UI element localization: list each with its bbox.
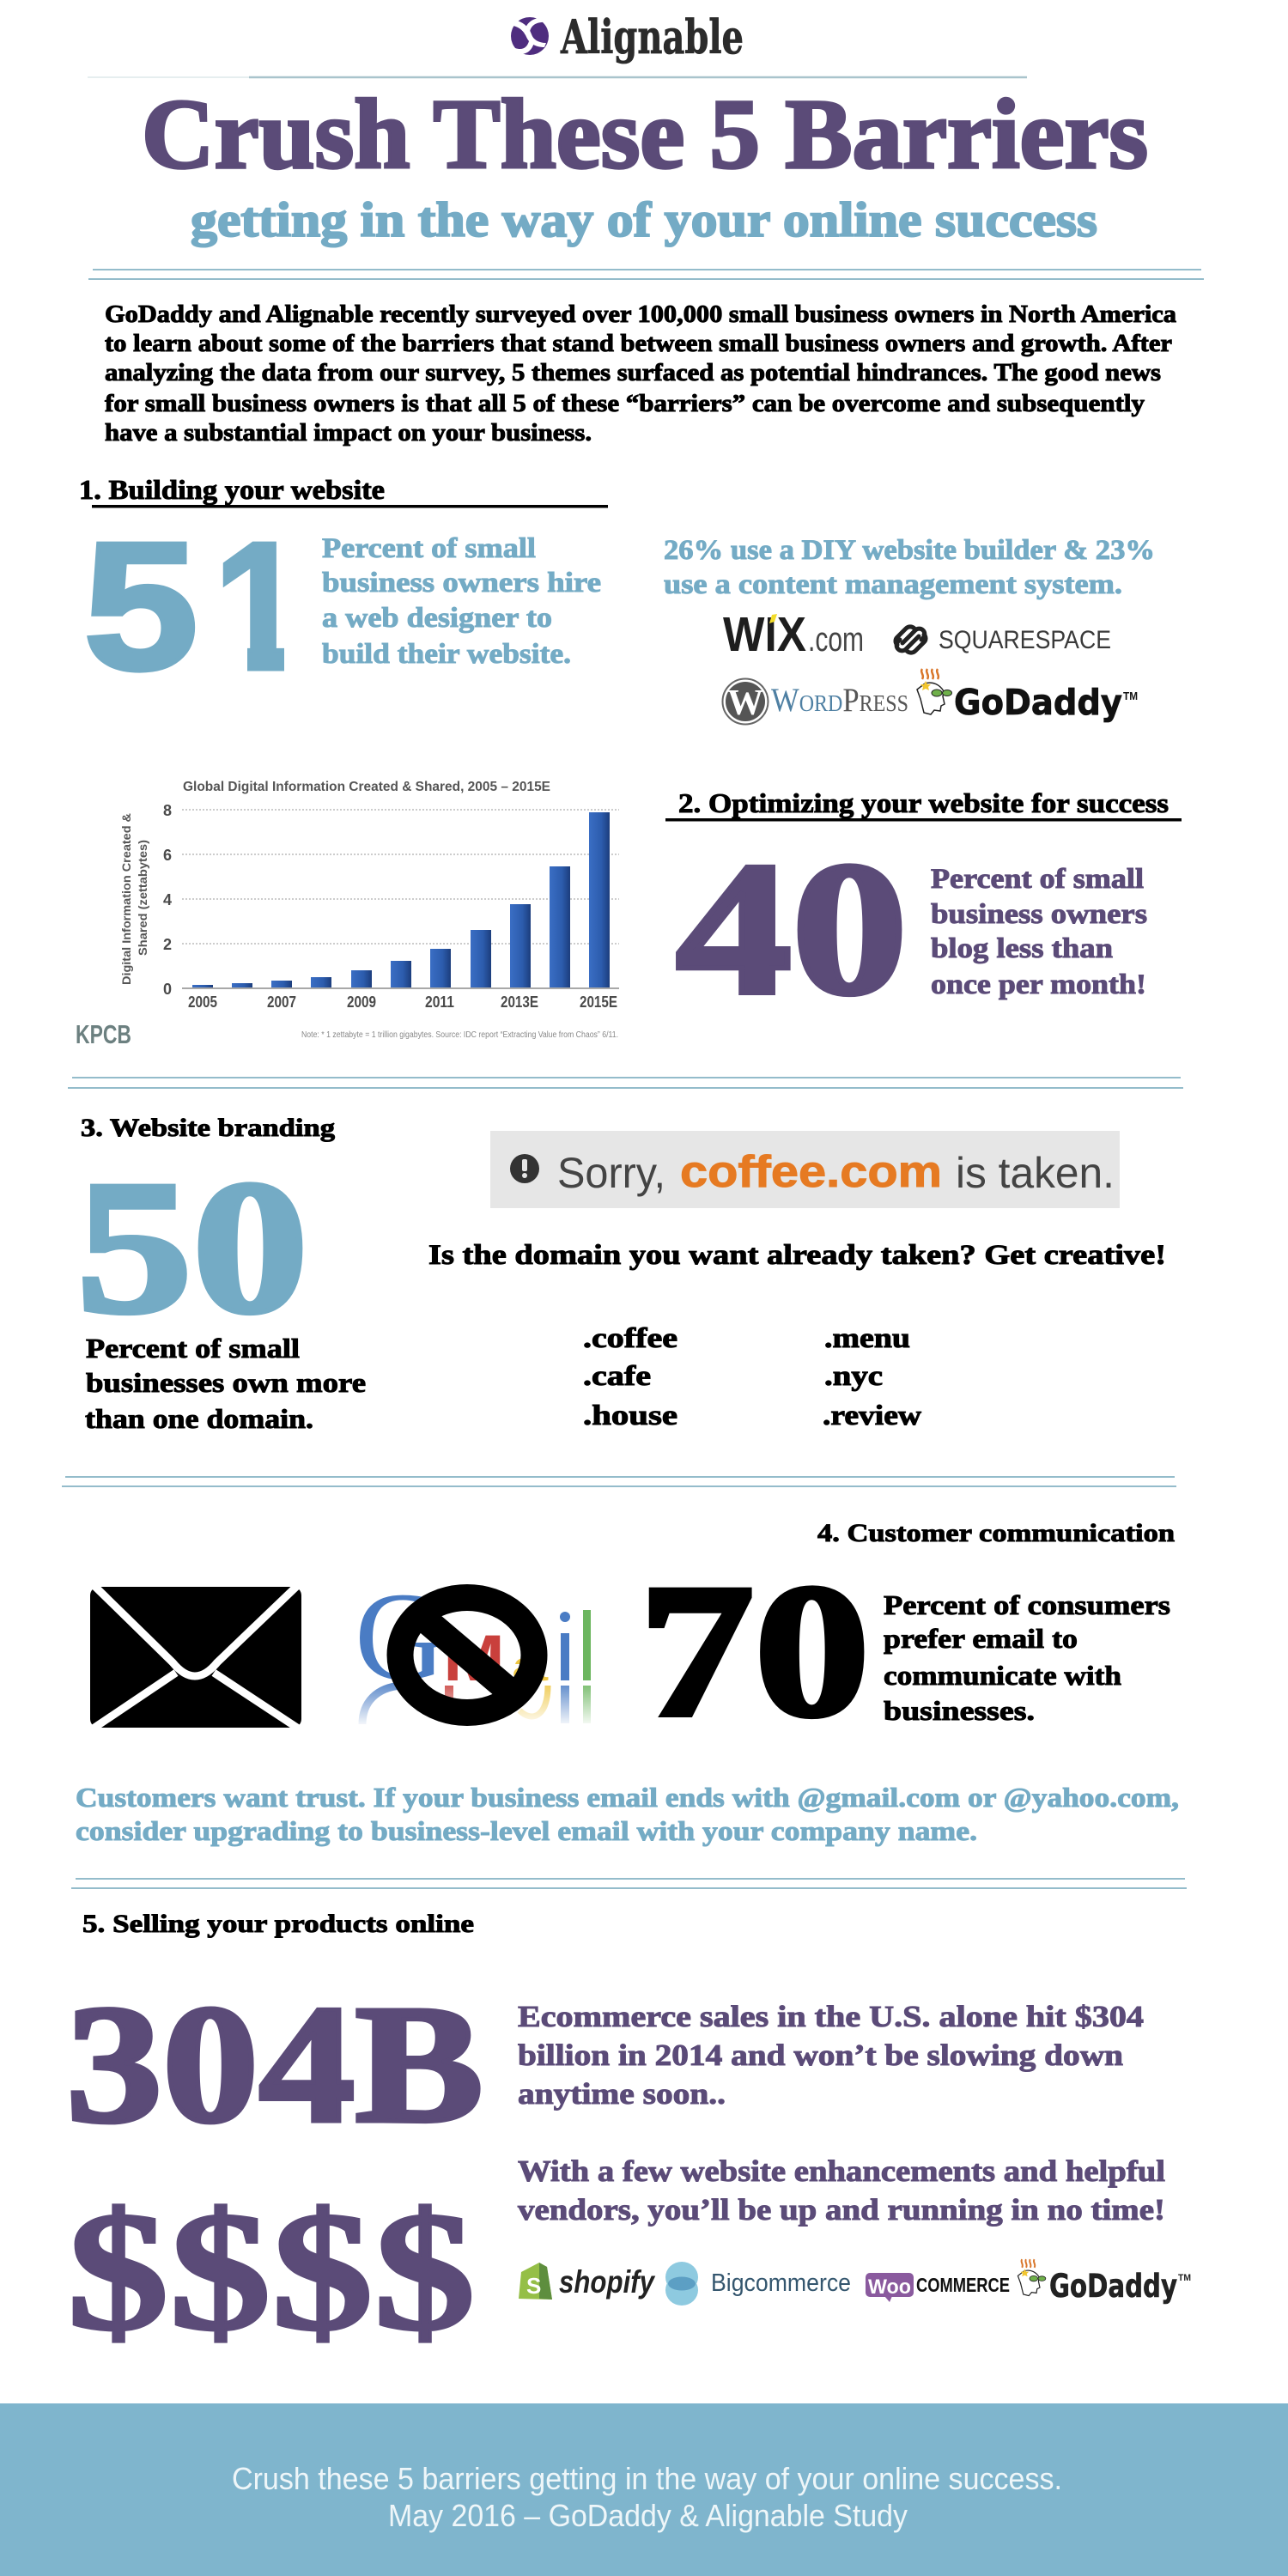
stat description 51: business owners hire: [322, 568, 601, 598]
domain list: .review: [823, 1400, 921, 1431]
logo: WordPress: [723, 678, 908, 725]
stat description 70: businesses.: [884, 1695, 1035, 1726]
panel: 2. Optimizing your website: [665, 787, 1182, 1035]
logo: WooCommerce: COMMERCE: [916, 2274, 1010, 2296]
y axis labels: [163, 802, 172, 998]
logo: Squarespace: SQUARESPACE: [939, 626, 1111, 654]
logo: GoDaddy: GoDaddy: [954, 682, 1122, 723]
subtitle: getting in the way of your online success: [191, 193, 1097, 247]
y axis labels: 2: [163, 936, 172, 953]
domain list: .cafe: [583, 1361, 651, 1392]
y axis labels: 6: [163, 847, 172, 864]
stat description 40: Percent of small: [931, 864, 1144, 895]
logo: Wix: .com: [808, 621, 864, 659]
logo: Shopify: shopify: [559, 2264, 656, 2300]
icon: envelope: [89, 1585, 302, 1731]
heading 3: 3. Website branding: [81, 1114, 335, 1142]
domain taken banner: [490, 1131, 1120, 1208]
domain list: .coffee: [583, 1323, 677, 1354]
stat description 50: than one domain.: [85, 1403, 313, 1434]
footer text: [232, 2461, 1062, 2533]
logo: GoDaddy small: GoDaddy: [1049, 2268, 1177, 2305]
y axis title: Digital Information Created &: [119, 813, 133, 985]
ecommerce text: anytime soon..: [518, 2077, 726, 2111]
footer text: May 2016 – GoDaddy & Alignable Study: [388, 2498, 908, 2533]
logo: Wix: WIX: [723, 607, 806, 662]
y axis labels: 0: [163, 981, 172, 998]
chart title: Global Digital Information Created & Shared, 2005 – 2015E: [183, 780, 550, 794]
logo: Shopify: S: [526, 2273, 541, 2299]
logo: GoDaddy small: TM: [1178, 2273, 1191, 2283]
domain list: [583, 1323, 921, 1431]
logo: Alignable: [511, 9, 744, 64]
domain taken banner: is taken.: [956, 1149, 1115, 1197]
stat description 51: a web designer to: [322, 603, 552, 634]
x axis labels: 2015E: [580, 993, 617, 1011]
logo: GoDaddy: [917, 669, 1138, 723]
intro paragraph: for small business owners is that all 5 of these “barriers” can be overcome and subsequently: [105, 391, 1145, 417]
title: Crush These 5 Barriers: [142, 80, 1148, 190]
x axis labels: 2005: [188, 993, 217, 1011]
KPCB mark: KPCB: [76, 1019, 131, 1049]
trust callout: Customers want trust. If your business email ends with @gmail.com or @yahoo.com,: [76, 1782, 1179, 1813]
stat description 51: Percent of small: [322, 533, 536, 564]
chart: Global Digital Information: [76, 780, 619, 1049]
footer text: Crush these 5 barriers getting in the way of your online success.: [232, 2461, 1062, 2496]
trust callout: consider upgrading to business-level email with your company name.: [76, 1815, 977, 1846]
DIY builder text: use a content management system.: [664, 569, 1122, 600]
intro paragraph: have a substantial impact on your business.: [105, 420, 592, 447]
stat description 50: businesses own more: [86, 1367, 366, 1398]
heading 1: 1. Building your website: [79, 474, 385, 505]
chart source note: Note: * 1 zettabyte = 1 trillion gigabytes. Source: IDC report “Extracting Value from Chaos” 6/11.: [301, 1030, 618, 1040]
stat 304B: 304B: [66, 1970, 483, 2158]
y axis title: [119, 813, 149, 985]
stat 70: 70: [639, 1546, 870, 1757]
panel: 3. Website branding: [76, 1114, 1166, 1434]
x axis labels: 2009: [347, 993, 376, 1011]
x axis labels: 2011: [425, 993, 454, 1011]
icon: Alignable mark: [511, 17, 549, 55]
stat description 70: [884, 1589, 1170, 1726]
trust callout: [76, 1782, 1179, 1846]
icon: GoDaddy mascot: [917, 669, 951, 714]
logo: WordPress: W: [727, 683, 763, 723]
intro paragraph: GoDaddy and Alignable recently surveyed over 100,000 small business owners in North America: [105, 301, 1176, 328]
icon: crossed-out Gmail logo: a: [512, 1642, 550, 1690]
icon: crossed-out Gmail logo: G: [355, 1566, 446, 1706]
intro paragraph: to learn about some of the barriers that stand between small business owners and growth. After: [105, 331, 1172, 357]
stat description 50: Percent of small: [86, 1333, 300, 1364]
domain list: .nyc: [824, 1361, 883, 1392]
ecommerce text: billion in 2014 and won’t be slowing down: [518, 2038, 1123, 2072]
stat 51: 5: [83, 504, 198, 708]
heading 5: 5. Selling your products online: [82, 1910, 474, 1938]
DIY builder text: 26% use a DIY website builder & 23%: [664, 535, 1155, 566]
logo wordmark: Alignable: [560, 9, 744, 64]
x axis labels: 2013E: [501, 993, 538, 1011]
y axis labels: 4: [163, 891, 172, 908]
stat description 70: Percent of consumers: [884, 1589, 1170, 1620]
stat 50: 50: [76, 1142, 308, 1353]
logo: Shopify: [519, 2263, 656, 2300]
heading 2: 2. Optimizing your website for success: [678, 787, 1169, 818]
ecommerce text: [518, 2000, 1165, 2227]
domain list: .house: [583, 1400, 677, 1431]
panel: 1. Building your website: [79, 474, 1155, 725]
icon: crossed-out Gmail logo: M: [443, 1622, 505, 1695]
heading 4: 4. Customer communication: [817, 1519, 1175, 1547]
stat description 40: blog less than: [931, 933, 1113, 964]
stat description 70: prefer email to: [884, 1623, 1078, 1654]
domain prompt: Is the domain you want already taken? Get creative!: [428, 1240, 1166, 1271]
logo: GoDaddy: TM: [1123, 690, 1138, 702]
stat description 40: business owners: [931, 899, 1147, 930]
DIY builder text: [664, 535, 1155, 600]
stat description 51: build their website.: [322, 639, 571, 670]
stat description 70: communicate with: [884, 1660, 1121, 1691]
logo: Wix: [723, 607, 864, 662]
domain taken banner: Sorry,: [557, 1149, 665, 1197]
intro paragraph: analyzing the data from our survey, 5 themes surfaced as potential hindrances. The good news: [105, 360, 1161, 386]
intro paragraph: [105, 301, 1176, 447]
logo: WordPress: WordPress: [771, 682, 908, 719]
logo: Bigcommerce: [665, 2262, 851, 2306]
icon: GoDaddy mascot small: [1018, 2259, 1046, 2296]
footer band: [0, 2403, 1288, 2576]
x axis labels: [188, 993, 617, 1011]
bars: [192, 812, 610, 988]
domain taken banner: coffee.com: [680, 1147, 942, 1197]
stat 51: 1: [214, 504, 305, 708]
y axis labels: 8: [163, 802, 172, 819]
logo: GoDaddy small: [1018, 2259, 1191, 2305]
stat description 40: once per month!: [931, 969, 1146, 1000]
ecommerce text: Ecommerce sales in the U.S. alone hit $304: [518, 2000, 1144, 2033]
panel: 5. Selling your products online: [66, 1910, 1191, 2366]
ecommerce text: With a few website enhancements and helpful: [518, 2154, 1165, 2188]
stat 40: 40: [676, 823, 908, 1035]
logo: WooCommerce: [866, 2273, 1010, 2302]
stat description 40: [931, 864, 1147, 1000]
x axis labels: 2007: [267, 993, 296, 1011]
domain list: .menu: [824, 1323, 910, 1354]
y axis title: Shared (zettabytes): [136, 840, 149, 956]
dollar signs: $$$$: [67, 2178, 476, 2366]
stat description 51: [322, 533, 601, 670]
logo: WooCommerce: Woo: [868, 2275, 911, 2299]
icon: crossed-out Gmail logo: [352, 1566, 597, 1728]
panel: 4. Customer communication: [76, 1519, 1179, 1846]
logo: Bigcommerce: Bigcommerce: [711, 2269, 851, 2297]
ecommerce text: vendors, you’ll be up and running in no time!: [518, 2193, 1165, 2227]
icon: alert: [510, 1154, 539, 1183]
stat 51: [83, 504, 319, 708]
stat description 50: [85, 1333, 366, 1434]
